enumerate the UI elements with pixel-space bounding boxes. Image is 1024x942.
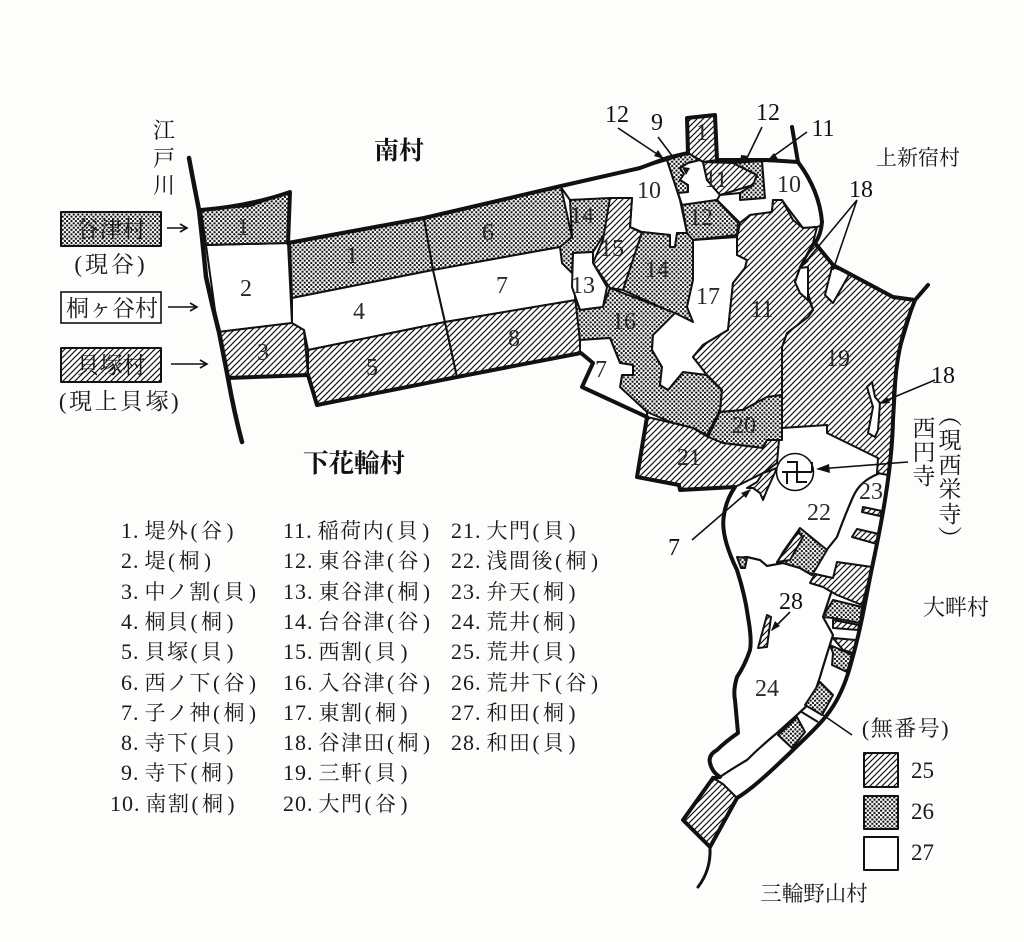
entry 2: 2.堤(桐) <box>121 548 212 573</box>
legend: village key <box>59 212 207 414</box>
legend heading: unnumbered: (無番号) <box>862 716 950 741</box>
arrow: Yatsu village <box>167 224 187 232</box>
parcel 1 west (dotted) <box>201 192 290 245</box>
parcel 21 (hatched) <box>637 417 779 489</box>
parcel numbers on the map: 2 <box>240 276 252 302</box>
parcel 5 (hatched) <box>308 322 457 405</box>
temple note: present Saieiji: 寺 <box>938 502 962 527</box>
parcel 11 main (hatched) <box>693 200 817 412</box>
parcel 25 strips (hatched) <box>833 620 859 653</box>
parcel 16 (dotted) <box>575 288 722 435</box>
temple note: present Saieiji <box>938 404 962 553</box>
parcel numbers on the map: 5 <box>366 355 378 381</box>
entry 10: 10.南割(桐) <box>110 791 236 816</box>
callout numbers with leader lines: 28 <box>779 589 803 615</box>
temple label: Saienji: 寺 <box>912 464 936 489</box>
outline: east boundary <box>683 127 928 847</box>
Yatsu village box: 谷津村 <box>76 217 146 242</box>
note: present Ya: (現谷) <box>74 252 148 277</box>
callout numbers with leader lines: 12 <box>605 102 629 128</box>
parcel 7 north (white) <box>433 247 576 322</box>
callout numbers with leader lines: 12 <box>756 100 780 126</box>
entry 12: 12.東谷津(谷) <box>283 548 432 573</box>
entry 24: 24.荒井(桐) <box>451 609 577 634</box>
entry 5: 5.貝塚(貝) <box>121 639 235 664</box>
Yatsu village box <box>61 212 161 246</box>
entry 4: 4.桐貝(桐) <box>121 609 235 634</box>
entry 26: 26.荒井下(谷) <box>451 670 600 695</box>
swatch 27 <box>864 837 934 870</box>
temple note: present Saieiji: 現 <box>938 428 962 453</box>
village name: Ohguro: 大畔村 <box>923 595 989 620</box>
boundary of parcels 22, 23 and 24 <box>720 473 880 777</box>
parcel 25 large (hatched) <box>810 562 872 605</box>
parcel 4 (white) <box>292 270 445 350</box>
parcel 26 strip one (dotted) <box>805 682 833 715</box>
arrow: Kaizuka village <box>171 360 207 368</box>
parcel 23 strips (hatched) <box>852 507 882 544</box>
entry 15: 15.西割(貝) <box>283 639 409 664</box>
parcel 12 north (dotted) <box>733 161 765 200</box>
swatch 26: 26 <box>911 799 934 824</box>
swatch 26 <box>864 796 934 829</box>
parcel 2 (white) <box>206 243 292 332</box>
parcel numbers on the map: 17 <box>696 284 720 310</box>
village name: Minami: 南村 <box>374 137 424 165</box>
entry 11: 11.稲荷内(貝) <box>283 518 431 543</box>
parcel 10 north pocket (white) <box>678 160 720 205</box>
parcel numbers on the map: 7 <box>496 273 508 299</box>
temple note: present Saieiji: ︵ <box>938 404 962 430</box>
temple label: Saienji <box>912 416 936 489</box>
outline: river Edogawa <box>189 158 242 442</box>
place-name list: column 1 <box>110 518 258 816</box>
entry 9: 9.寺下(桐) <box>121 760 235 785</box>
parcel 28 (hatched) <box>758 615 771 648</box>
callout numbers with leader lines: 7 <box>668 535 680 561</box>
callout numbers with leader lines: 18 <box>849 177 873 203</box>
parcels 22, 23, 24 base (white) <box>710 425 888 798</box>
outline: north boundary <box>201 115 798 243</box>
arrow: Kirigaya village <box>168 303 197 311</box>
swatch 25: 25 <box>911 758 934 783</box>
parcel numbers on the map: 19 <box>826 346 850 372</box>
entry 7: 7.子ノ神(桐) <box>121 700 258 725</box>
outline: south and west boundary <box>228 353 751 778</box>
parcel numbers on the map: 11 <box>750 297 774 323</box>
parcel 13 (white) <box>572 252 607 310</box>
village name: Kamishinshuku: 上新宿村 <box>876 146 960 170</box>
swatch 25 <box>864 753 934 787</box>
entry 16: 16.入谷津(谷) <box>283 670 432 695</box>
parcel numbers on the map: 12 <box>689 205 713 231</box>
entry 13: 13.東谷津(桐) <box>283 579 432 604</box>
Kirigaya village box: 桐ヶ谷村 <box>66 296 158 321</box>
parcel 12 south (dotted) <box>682 200 738 240</box>
parcel numbers on the map: 1 <box>696 120 708 146</box>
parcel 3 (hatched) <box>218 323 308 378</box>
Kaizuka village box <box>61 348 161 382</box>
temple note: present Saieiji: ︶ <box>938 527 962 553</box>
callout numbers with leader lines: 11 <box>811 116 835 142</box>
village name: Shimohanawa: 下花輪村 <box>303 449 405 478</box>
parcel numbers on the map: 3 <box>257 340 269 366</box>
parcel numbers on the map: 10 <box>777 172 801 198</box>
place-name list: column 3 <box>451 518 600 755</box>
entry 28: 28.和田(貝) <box>451 730 577 755</box>
parcel 9 (dotted) <box>667 153 700 193</box>
entry 17: 17.東割(桐) <box>283 700 409 725</box>
parcel 15 (hatched) <box>593 198 642 290</box>
callout numbers with leader lines: 18 <box>931 363 955 389</box>
parcel 20 (dotted) <box>708 395 782 448</box>
parcel 25 sliver (hatched) <box>777 532 803 562</box>
entry 6: 6.西ノ下(谷) <box>121 670 258 695</box>
parcel numbers on the map: 8 <box>508 326 520 352</box>
parcel numbers on the map: 1 <box>237 215 249 241</box>
parcel 1 east (dotted) <box>290 218 433 298</box>
Kaizuka village box: 貝塚村 <box>76 353 146 378</box>
parcel divider <box>723 711 818 798</box>
river label: 戸 <box>153 146 175 171</box>
parcel numbers on the map: 4 <box>353 299 365 325</box>
entry 21: 21.大門(貝) <box>451 518 577 543</box>
parcel 26 east lower (dotted) <box>830 645 852 672</box>
parcel 26 speck (dotted) <box>737 557 747 568</box>
parcel numbers on the map: 22 <box>807 500 831 526</box>
village name: Minowayama: 三輪野山村 <box>760 882 868 906</box>
parcel 26 east (dotted) <box>823 600 862 623</box>
parcel 14 centre (dotted) <box>623 232 693 322</box>
place-name list: column 2 <box>283 518 432 816</box>
entry 22: 22.浅間後(桐) <box>451 548 600 573</box>
entry 19: 19.三軒(貝) <box>283 760 409 785</box>
parcel 26 strip two (dotted) <box>778 717 805 748</box>
entry 23: 23.弁天(桐) <box>451 579 577 604</box>
parcel numbers on the map: 15 <box>600 236 624 262</box>
entry 8: 8.寺下(貝) <box>121 730 235 755</box>
parcel 17 (white) <box>652 237 747 390</box>
parcel 26 near 22 (dotted) <box>777 528 827 575</box>
callout numbers with leader lines: 9 <box>651 110 663 136</box>
parcel numbers on the map: 14 <box>645 257 669 283</box>
parcel 11 tower (hatched) <box>687 115 717 162</box>
swatch 27: 27 <box>911 840 934 865</box>
river label: 江 <box>153 118 175 143</box>
temple symbol <box>776 454 814 490</box>
parcel numbers on the map: 13 <box>571 273 595 299</box>
parcel numbers on the map: 6 <box>482 220 494 246</box>
parcel numbers on the map: 23 <box>859 479 883 505</box>
parcel 8 (hatched) <box>445 300 581 377</box>
parcel 10 east (white) <box>717 161 822 228</box>
parcel 18 strips (white) <box>795 267 880 437</box>
parcel numbers on the map: 7 <box>595 357 607 383</box>
parcel 7 south sliver (hatched) <box>747 468 777 500</box>
parcel 10 west (white) <box>560 160 687 247</box>
entry 27: 27.和田(桐) <box>451 700 577 725</box>
parcel numbers on the map: 21 <box>677 445 701 471</box>
entry 1: 1.堤外(谷) <box>121 518 235 543</box>
parcel numbers on the map: 10 <box>637 178 661 204</box>
parcel 11 north (hatched) <box>703 162 757 195</box>
parcel numbers on the map <box>237 120 883 702</box>
outline: southern stream <box>698 848 710 887</box>
parcel 6 (dotted) <box>424 187 572 270</box>
parcel numbers on the map: 20 <box>732 413 756 439</box>
temple label: Saienji: 円 <box>912 440 936 465</box>
map: village parcels <box>189 115 928 887</box>
parcel 19 (hatched) <box>782 243 915 475</box>
temple note: present Saieiji: 栄 <box>938 477 962 502</box>
temple note: present Saieiji: 西 <box>938 453 962 478</box>
entry 18: 18.谷津田(桐) <box>283 730 432 755</box>
entry 3: 3.中ノ割(貝) <box>121 579 258 604</box>
parcel numbers on the map: 14 <box>570 203 594 229</box>
entry 20: 20.大門(谷) <box>283 791 409 816</box>
parcel 25 south (hatched) <box>683 778 737 847</box>
note: present Kamikaizuka: (現上貝塚) <box>59 389 181 414</box>
parcel numbers on the map: 16 <box>612 309 636 335</box>
temple label: Saienji: 西 <box>912 416 936 441</box>
entry 25: 25.荒井(貝) <box>451 639 577 664</box>
entry 14: 14.台谷津(谷) <box>283 609 432 634</box>
parcel 7 centre (white) <box>580 338 647 417</box>
parcel 14 west (dotted) <box>560 198 610 273</box>
river label <box>153 118 175 198</box>
parcel numbers on the map: 24 <box>755 676 779 702</box>
callout numbers with leader lines <box>605 100 955 735</box>
parcel numbers on the map: 11 <box>704 167 728 193</box>
river label: 川 <box>153 173 175 198</box>
parcel numbers on the map: 1 <box>346 243 358 269</box>
